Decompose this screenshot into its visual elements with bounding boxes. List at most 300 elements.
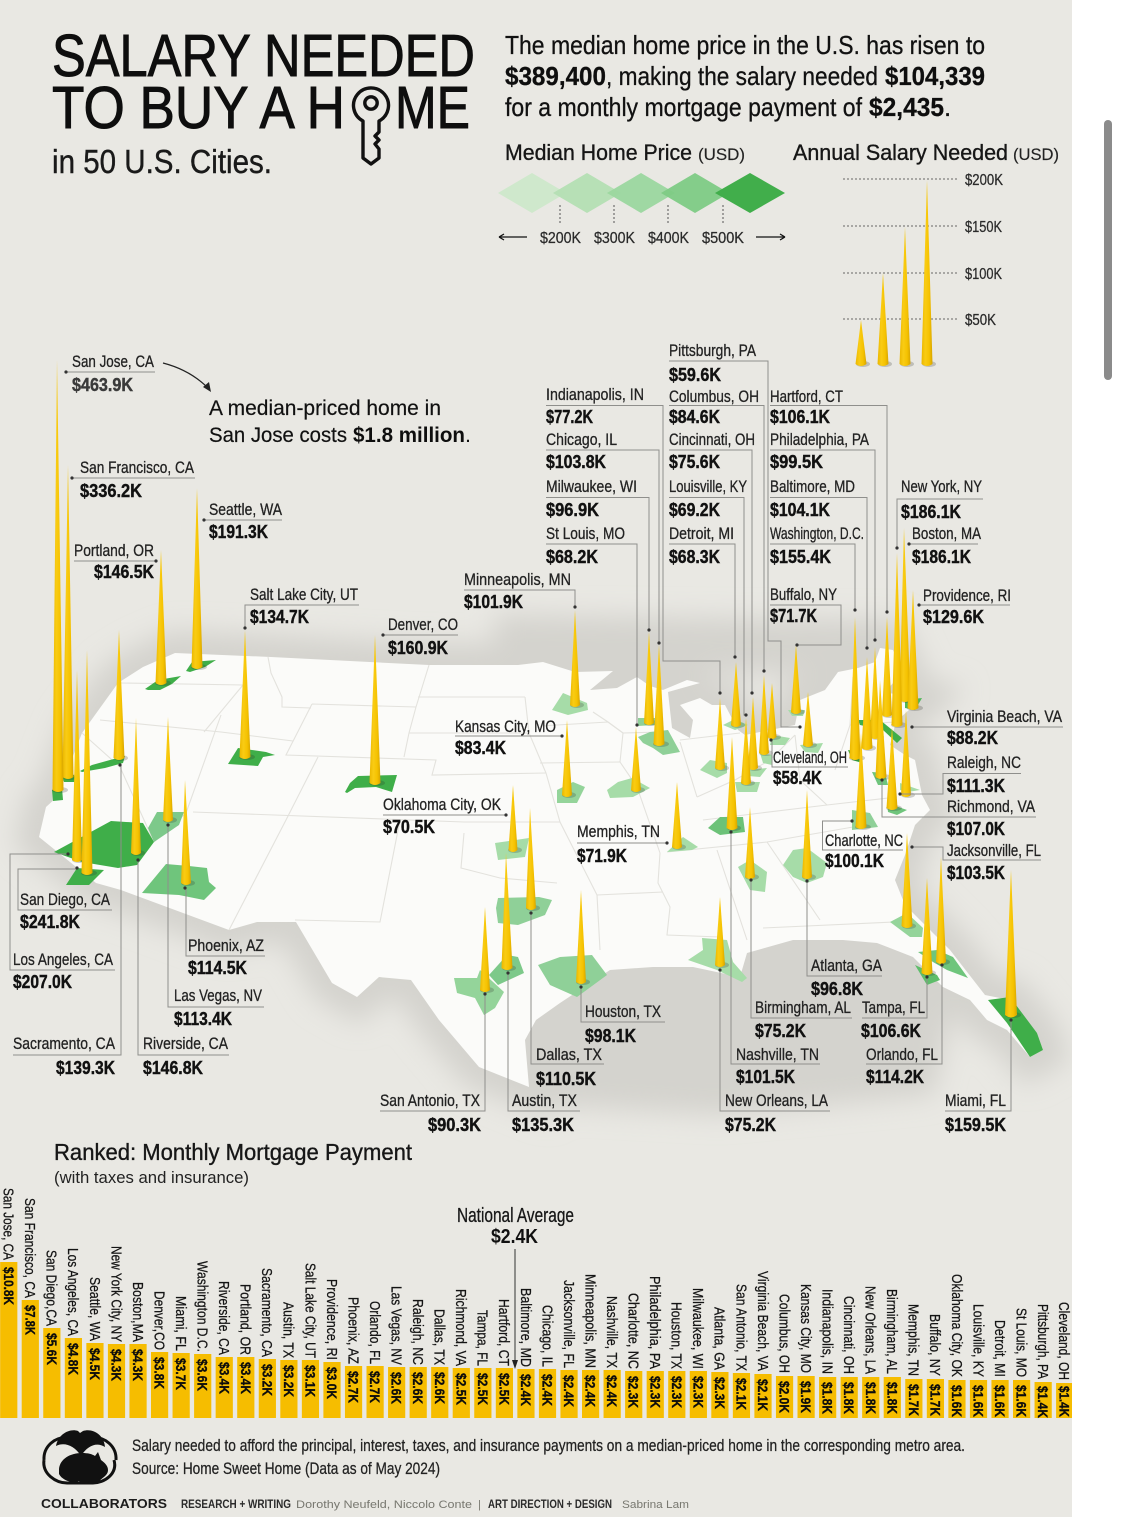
bar: St Louis: St Louis, MO <box>1012 1308 1029 1377</box>
label: St Louis <box>546 524 639 727</box>
legend: median home price: $500K <box>702 230 744 247</box>
bar: New York City <box>107 1246 125 1418</box>
label: New York <box>895 477 983 550</box>
label: Pittsburgh: $59.6K <box>669 365 721 385</box>
label: Kansas City <box>455 717 564 758</box>
label: Detroit: Detroit, MI <box>669 524 734 543</box>
bar: New Orleans: New Orleans, LA <box>862 1286 879 1374</box>
label: Washington D.C. <box>770 524 864 612</box>
label: Portland: $146.5K <box>94 562 154 582</box>
label: Hartford: Hartford, CT <box>770 387 843 406</box>
bar: Philadelphia: $2.3K <box>647 1376 663 1408</box>
label: Seattle: $191.3K <box>209 522 268 542</box>
bar: Oklahoma City: $1.6K <box>949 1385 965 1417</box>
bar: Atlanta: Atlanta, GA <box>711 1307 728 1370</box>
credits: Dorothy Neufeld, Niccolo Conte <box>296 1499 472 1511</box>
bar: Louisville: $1.6K <box>971 1385 987 1417</box>
bar: Austin: $3.2K <box>281 1365 297 1397</box>
label: Riverside <box>136 858 229 1078</box>
bar: San Jose: San Jose, CA <box>0 1188 17 1260</box>
bar: Orlando <box>366 1301 384 1418</box>
bar: New Orleans: $1.8K <box>863 1382 879 1414</box>
label: Raleigh <box>898 753 1021 796</box>
cone: Cincinnati <box>748 697 762 771</box>
label: San Francisco <box>70 458 195 501</box>
label: Phoenix <box>183 886 265 978</box>
cone: Minneapolis <box>570 610 584 708</box>
cone: San Francisco <box>62 465 78 780</box>
legend: annual salary needed: (USD) <box>1013 145 1059 164</box>
label: Baltimore: Baltimore, MD <box>770 477 855 496</box>
heading: ranked monthly mortgage payment: (with taxes and insurance) <box>54 1168 249 1187</box>
title: TO BUY A H <box>52 75 345 141</box>
label: Virginia Beach: $88.2K <box>947 728 998 748</box>
label: Buffalo: Buffalo, NY <box>770 585 837 604</box>
label: Charlotte: $100.1K <box>825 851 884 871</box>
label: Philadelphia: $99.5K <box>770 452 823 472</box>
label: Denver <box>381 615 458 658</box>
callout: San Jose median home: A median-priced home in <box>209 396 441 420</box>
label: Memphis: $71.9K <box>577 846 627 866</box>
label: Nashville: Nashville, TN <box>736 1045 819 1064</box>
bar: Washington D.C.: $3.6K <box>195 1359 211 1391</box>
label: New Orleans: $75.2K <box>725 1115 776 1135</box>
label: Louisville: Louisville, KY <box>669 477 747 496</box>
bar: Washington D.C. <box>194 1261 211 1418</box>
bar: Seattle <box>86 1277 104 1418</box>
bar: Boston <box>129 1282 147 1418</box>
label: Houston: $98.1K <box>585 1026 636 1046</box>
label: Charlotte <box>822 819 903 871</box>
annotation: national average: $2.4K <box>491 1226 538 1248</box>
bar: San Antonio: $2.1K <box>733 1378 749 1410</box>
cone: Jacksonville <box>902 833 916 929</box>
city labels <box>10 341 1063 1135</box>
bar: Baltimore <box>517 1288 535 1418</box>
bar: Denver: $3.8K <box>152 1357 168 1389</box>
bar: Richmond: Richmond, VA <box>452 1289 469 1366</box>
bar: Buffalo: Buffalo, NY <box>926 1314 943 1376</box>
bar: Virginia Beach: Virginia Beach, VA <box>754 1271 771 1371</box>
map halo <box>39 620 1043 1110</box>
label: Las Vegas <box>166 823 264 1029</box>
label: Tampa: Tampa, FL <box>862 998 925 1017</box>
bar: St Louis: $1.6K <box>1014 1385 1030 1417</box>
cone: Cleveland <box>767 683 781 740</box>
label: Phoenix: Phoenix, AZ <box>188 936 264 955</box>
label: Riverside: Riverside, CA <box>143 1034 229 1053</box>
label: Birmingham: Birmingham, AL <box>755 998 851 1017</box>
label: Birmingham: $75.2K <box>755 1021 806 1041</box>
label: Chicago <box>546 430 661 645</box>
bar: New York City: $4.3K <box>109 1349 125 1381</box>
label: Hartford: $106.1K <box>770 407 830 427</box>
bar: Orlando: $2.7K <box>367 1371 383 1403</box>
cone: Miami <box>1005 870 1021 1018</box>
label: Columbus: $84.6K <box>669 407 720 427</box>
bar: Houston: Houston, TX <box>668 1302 685 1369</box>
cone: Virginia Beach <box>901 710 915 798</box>
bar: Atlanta: $2.3K <box>712 1377 728 1409</box>
bar: Orlando: Orlando, FL <box>366 1301 383 1364</box>
label: Richmond <box>880 778 1036 839</box>
bar: Jacksonville: $2.4K <box>561 1375 577 1407</box>
footnote and source: Salary needed to afford the principal, interest, taxes, and insurance payments on a median-priced home in the corresponding metro area. <box>132 1437 965 1455</box>
bar: Buffalo <box>926 1314 944 1418</box>
legend: annual salary needed: $150K <box>965 219 1002 236</box>
label: San Diego: $241.8K <box>20 912 80 932</box>
label: Philadelphia: Philadelphia, PA <box>770 430 870 449</box>
bar: Chicago <box>538 1305 556 1418</box>
legend: median home price <box>498 140 785 247</box>
bar: Dallas: $2.6K <box>432 1372 448 1404</box>
bar: Cleveland: Cleveland, OH <box>1055 1302 1072 1380</box>
label: Phoenix: $114.5K <box>188 958 247 978</box>
label: Milwaukee <box>546 477 651 632</box>
bar: Austin: Austin, TX <box>280 1302 297 1358</box>
bar: Austin <box>280 1302 298 1418</box>
bar: San Diego <box>43 1250 60 1418</box>
label: Los Angeles: Los Angeles, CA <box>13 950 114 969</box>
bar: Los Angeles: $4.8K <box>65 1343 81 1375</box>
intro text block: The median home price in the U.S. has risen to <box>505 30 985 60</box>
label: Orlando: $114.2K <box>866 1067 924 1087</box>
label: Orlando: Orlando, FL <box>866 1045 938 1064</box>
bar: Nashville: Nashville, TX <box>603 1296 620 1368</box>
legend: annual salary needed: Annual Salary Needed <box>793 140 1008 165</box>
bar: Memphis: $1.7K <box>906 1384 922 1416</box>
label: Houston <box>579 985 665 1046</box>
bar: Chicago: $2.4K <box>540 1374 556 1406</box>
cone: Houston <box>576 890 590 985</box>
label: Oklahoma City: $70.5K <box>383 817 435 837</box>
cone: Seattle <box>191 488 207 670</box>
label: Detroit: $68.3K <box>669 547 720 567</box>
label: St Louis: $68.2K <box>546 547 598 567</box>
label: Cincinnati: $75.6K <box>669 452 720 472</box>
bar: Phoenix: Phoenix, AZ <box>344 1297 361 1364</box>
bar: Los Angeles <box>64 1248 82 1418</box>
label: Nashville <box>729 830 820 1087</box>
bar: Hartford: $2.5K <box>496 1373 512 1405</box>
cone: Nashville <box>726 737 741 831</box>
label: Oklahoma City: Oklahoma City, OK <box>383 795 502 814</box>
label: Charlotte: Charlotte, NC <box>825 831 903 850</box>
bar: Denver <box>150 1291 168 1418</box>
logo <box>44 1430 116 1483</box>
label: Oklahoma City <box>383 795 508 837</box>
bar: Salt Lake City: $3.1K <box>302 1365 318 1397</box>
label: Baltimore: $104.1K <box>770 500 830 520</box>
cone: Orlando <box>936 857 950 965</box>
bar: Kansas City: Kansas City, MO <box>797 1284 814 1373</box>
subtitle: in 50 U.S. Cities. <box>52 143 272 180</box>
legend: median home price: (USD) <box>698 145 745 164</box>
label: New York: New York, NY <box>901 477 982 496</box>
label: Washington D.C.: Washington, D.C. <box>770 524 864 543</box>
label: Pittsburgh <box>669 341 802 729</box>
heading: ranked monthly mortgage payment: Ranked: Monthly Mortgage Payment <box>54 1139 413 1165</box>
label: Richmond: Richmond, VA <box>947 797 1036 816</box>
label: San Jose: $463.9K <box>72 375 133 395</box>
label: Sacramento <box>13 763 122 1078</box>
bar: Hartford: Hartford, CT <box>495 1299 512 1366</box>
bar: San Francisco <box>21 1198 39 1418</box>
label: Providence <box>917 586 1011 627</box>
bar: Miami <box>172 1296 190 1418</box>
bar: Birmingham: $1.8K <box>884 1382 900 1414</box>
cone: Sacramento <box>114 630 128 761</box>
legend: median home price: $300K <box>594 230 635 247</box>
bar: Minneapolis: $2.4K <box>583 1375 599 1407</box>
label: Minneapolis: Minneapolis, MN <box>464 570 571 589</box>
label: Boston: Boston, MA <box>912 524 982 543</box>
annotation: national average <box>457 1205 574 1369</box>
bar: Birmingham: Birmingham, AL <box>883 1289 900 1374</box>
label: Denver: Denver, CO <box>388 615 458 634</box>
label: Miami: $159.5K <box>945 1115 1006 1135</box>
label: New York: $186.1K <box>901 502 961 522</box>
label: Los Angeles <box>10 852 115 992</box>
label: Tampa: $106.6K <box>861 1021 921 1041</box>
legend: annual salary needed <box>793 140 1059 367</box>
icon: key <box>354 88 389 164</box>
intro text block: . <box>944 92 951 122</box>
label: Buffalo: $71.7K <box>770 606 817 626</box>
label: Riverside: $146.8K <box>143 1058 203 1078</box>
legend: annual salary needed: $50K <box>965 312 996 329</box>
cone: Las Vegas <box>163 717 177 823</box>
bar: Chicago: Chicago, IL <box>538 1305 555 1367</box>
cone: Philadelphia <box>870 647 884 740</box>
label: Raleigh: Raleigh, NC <box>947 753 1021 772</box>
label: Kansas City: Kansas City, MO <box>455 717 556 736</box>
label: Minneapolis: $101.9K <box>464 592 523 612</box>
label: Dallas <box>529 911 604 1089</box>
bar: Portland: $3.4K <box>238 1362 254 1394</box>
title: SALARY NEEDED <box>52 23 475 89</box>
cone: Pittsburgh <box>803 692 817 748</box>
label: Austin: Austin, TX <box>512 1091 577 1110</box>
label: Kansas City: $83.4K <box>455 738 506 758</box>
label: Virginia Beach <box>910 707 1063 748</box>
bar: Hartford <box>495 1299 513 1418</box>
cone: Phoenix <box>181 780 195 886</box>
bar: Dallas: Dallas, TX <box>431 1309 448 1365</box>
bar: San Jose: $10.8K <box>1 1267 17 1305</box>
cone: Austin <box>502 853 516 971</box>
label: Salt Lake City <box>243 585 359 630</box>
bar: Los Angeles: Los Angeles, CA <box>64 1248 81 1336</box>
label: Denver: $160.9K <box>388 638 448 658</box>
bar: Dallas <box>431 1309 448 1418</box>
label: San Francisco: $336.2K <box>80 481 142 501</box>
title: ME <box>395 75 470 141</box>
label: Raleigh: $111.3K <box>947 776 1005 796</box>
bar: Raleigh: Raleigh, NC <box>409 1299 426 1365</box>
label: Las Vegas: $113.4K <box>174 1009 232 1029</box>
bar: San Francisco: $7.8K <box>22 1305 38 1335</box>
label: Louisville: $69.2K <box>669 500 720 520</box>
label: Seattle <box>202 500 283 542</box>
bar: San Jose <box>0 1188 17 1418</box>
label: Birmingham <box>749 878 852 1041</box>
cone: Tampa <box>922 878 936 976</box>
legend: median home price: $400K <box>648 230 689 247</box>
bar: Miami: $3.7K <box>173 1358 189 1390</box>
label: Portland: Portland, OR <box>74 541 154 560</box>
label: Cincinnati: Cincinnati, OH <box>669 430 755 449</box>
intro text block: for a monthly mortgage payment of <box>505 92 863 122</box>
label: Nashville: $101.5K <box>736 1067 795 1087</box>
title <box>52 23 475 141</box>
label: Portland <box>74 541 158 582</box>
label: Cleveland <box>769 738 848 788</box>
label: Chicago: Chicago, IL <box>546 430 617 449</box>
label: Cleveland: Cleveland, OH <box>773 748 847 767</box>
cone: Memphis <box>672 782 686 850</box>
label: Las Vegas: Las Vegas, NV <box>174 986 263 1005</box>
credits: COLLABORATORS <box>41 1497 167 1511</box>
bar: Tampa: Tampa, FL <box>474 1310 491 1366</box>
cone: Providence <box>907 590 923 711</box>
bar: Detroit <box>991 1320 1009 1418</box>
cone: Dallas <box>526 808 540 911</box>
cone: Louisville <box>741 718 755 786</box>
callout: San Jose median home: . <box>465 423 471 447</box>
label: Austin <box>506 971 580 1135</box>
bar: San Francisco: San Francisco, CA <box>21 1198 38 1298</box>
label: Indianapolis: $77.2K <box>546 407 593 427</box>
cone: Los Angeles <box>72 670 86 863</box>
label: San Jose: San Jose, CA <box>72 352 155 371</box>
label: Columbus: Columbus, OH <box>669 387 759 406</box>
label: Atlanta <box>805 879 883 999</box>
intro text block: $2,435 <box>869 92 944 122</box>
label: Baltimore <box>770 477 869 650</box>
scrollbar thumb <box>1104 120 1112 380</box>
bar: Portland <box>237 1284 254 1418</box>
label: Sacramento: Sacramento, CA <box>13 1034 116 1053</box>
label: Memphis <box>577 822 669 866</box>
cones: annual salary needed by city <box>52 360 1021 1018</box>
label: Hartford <box>770 387 889 614</box>
label: Louisville <box>669 477 748 717</box>
bar: Providence <box>323 1279 341 1418</box>
legend: annual salary needed: $200K <box>965 172 1003 189</box>
intro text block: $389,400 <box>505 61 606 91</box>
bar: Charlotte: $2.3K <box>626 1376 642 1408</box>
bar: Cleveland: $1.4K <box>1056 1386 1072 1417</box>
bar: Tampa: $2.5K <box>475 1373 491 1405</box>
cone: San Diego <box>81 650 97 876</box>
bar: Sacramento: Sacramento, CA <box>258 1268 275 1357</box>
bar: Charlotte: Charlotte, NC <box>624 1293 641 1369</box>
label: Jacksonville: Jacksonville, FL <box>947 841 1041 860</box>
cone: Portland <box>155 550 171 686</box>
label: Jacksonville <box>910 841 1041 883</box>
label: New Orleans <box>718 968 830 1135</box>
bar: Cincinnati: Cincinnati, OH <box>840 1296 857 1374</box>
cone: Baltimore <box>862 657 876 751</box>
callout: San Jose median home: San Jose costs <box>209 423 347 447</box>
label: Atlanta: $96.8K <box>811 979 863 999</box>
label: Providence: $129.6K <box>923 607 984 627</box>
label: Providence: Providence, RI <box>923 586 1011 605</box>
bar: Memphis: Memphis, TN <box>905 1304 922 1376</box>
bar: Sacramento: $3.2K <box>259 1364 275 1396</box>
cone: Birmingham <box>745 807 759 880</box>
bar: Riverside: $3.4K <box>216 1362 232 1394</box>
bar: Phoenix: $2.7K <box>346 1371 362 1403</box>
bar: Pittsburgh: Pittsburgh, PA <box>1034 1304 1051 1379</box>
intro text block <box>505 30 985 122</box>
bar: Miami: Miami, FL <box>172 1296 189 1351</box>
cone: New Orleans <box>715 897 729 968</box>
bar: Portland: Portland, OR <box>237 1284 254 1355</box>
label: Miami: Miami, FL <box>945 1091 1006 1110</box>
bar: Indianapolis: Indianapolis, IN <box>818 1289 835 1374</box>
label: Sacramento: $139.3K <box>56 1058 115 1078</box>
bar: Indianapolis: $1.8K <box>820 1382 836 1414</box>
label: Milwaukee: Milwaukee, WI <box>546 477 637 496</box>
cone: Chicago <box>653 645 669 747</box>
label: Detroit <box>669 524 737 659</box>
cone: Washington D.C. <box>849 617 865 761</box>
bar: Salt Lake City: Salt Lake City, UT <box>301 1263 318 1358</box>
label: San Diego <box>18 866 112 932</box>
bar: Detroit: Detroit, MI <box>991 1320 1008 1377</box>
bar: Charlotte <box>624 1293 642 1418</box>
cone: St. Louis <box>631 727 645 793</box>
bar: Philadelphia: Philadelphia, PA <box>646 1276 663 1369</box>
label: San Jose <box>64 352 155 395</box>
bar: Jacksonville: Jacksonville, FL <box>560 1280 577 1368</box>
credits: | <box>478 1499 481 1511</box>
label: Boston: $186.1K <box>912 547 971 567</box>
bar: Seattle: $4.5K <box>87 1348 103 1380</box>
label: Memphis: Memphis, TN <box>577 822 660 841</box>
arrow: San Jose callout <box>163 363 211 392</box>
cone: Boston <box>899 528 915 703</box>
label: Los Angeles: $207.0K <box>13 972 72 992</box>
label: Indianapolis <box>546 385 722 695</box>
label: San Antonio: $90.3K <box>428 1115 481 1135</box>
label: Buffalo <box>770 585 841 647</box>
bar chart: monthly mortgage payment <box>0 1188 1072 1418</box>
cone: Columbus <box>759 675 773 756</box>
cone: Riverside <box>131 718 145 856</box>
cone: Milwaukee <box>644 632 658 726</box>
bar: Richmond: $2.5K <box>453 1373 469 1405</box>
bar: San Diego: San Diego,CA <box>43 1250 60 1326</box>
intro text block: $104,339 <box>885 61 985 91</box>
bar: Pittsburgh: $1.4K <box>1035 1386 1051 1418</box>
label: San Diego: San Diego, CA <box>20 890 111 909</box>
label: Indianapolis: Indianapolis, IN <box>546 385 644 404</box>
cone: Kansas City <box>562 720 576 798</box>
bar: Riverside: Riverside, CA <box>215 1281 232 1355</box>
bar: Nashville <box>603 1296 621 1418</box>
cone: San Jose <box>52 360 68 793</box>
label: Atlanta: Atlanta, GA <box>811 956 883 975</box>
label: San Francisco: San Francisco, CA <box>80 458 195 477</box>
cone: Charlotte <box>855 733 871 830</box>
cone: New York <box>891 553 907 728</box>
label: Dallas: Dallas, TX <box>536 1045 602 1064</box>
label: Tampa <box>861 975 929 1041</box>
label: Jacksonville: $103.5K <box>947 863 1005 883</box>
